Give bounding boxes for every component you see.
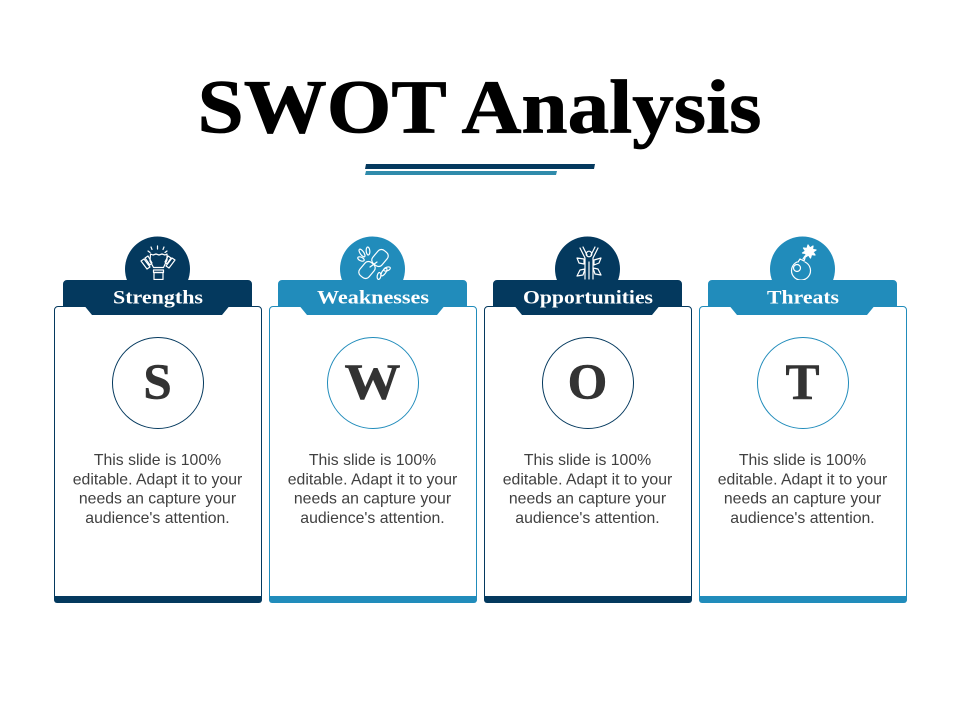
card: weaknesses <box>270 306 476 600</box>
text block: opportunities: needs an capture your <box>509 490 666 508</box>
text block: weaknesses: This slide is 100% <box>309 452 436 469</box>
text block: opportunities: This slide is 100% <box>524 452 651 469</box>
text block: strengths: editable. Adapt it to your <box>73 471 242 488</box>
letter circle: T <box>758 338 848 428</box>
card bottom bar: threats <box>699 596 907 603</box>
text block: weaknesses: audience's attention. <box>300 510 445 527</box>
title underline <box>365 164 595 175</box>
text block: threats: needs an capture your <box>724 490 881 508</box>
text block: strengths: audience's attention. <box>85 510 230 527</box>
letter circle: W: W <box>344 355 400 411</box>
letter circle: T: T <box>785 355 820 411</box>
panel: opportunities <box>484 236 692 603</box>
panel: weaknesses <box>269 236 477 603</box>
icon badge: strengths <box>125 236 190 302</box>
card bottom bar: strengths <box>54 596 262 603</box>
header tab: weaknesses <box>278 280 467 315</box>
text block: threats: audience's attention. <box>730 510 875 527</box>
text block: threats: editable. Adapt it to your <box>718 471 887 488</box>
letter circle: S: S <box>143 355 172 411</box>
text block: strengths: This slide is 100% <box>94 452 221 469</box>
header tab: opportunities <box>493 280 682 315</box>
card bottom bar: weaknesses <box>269 596 477 603</box>
text block: opportunities: editable. Adapt it to your <box>503 471 672 488</box>
panel: strengths <box>54 236 262 603</box>
header tab: strengths <box>63 280 252 315</box>
title: SWOT Analysis <box>198 66 762 150</box>
letter circle: W <box>328 338 418 428</box>
text block: weaknesses: editable. Adapt it to your <box>288 471 457 488</box>
text block: weaknesses: needs an capture your <box>294 490 451 508</box>
heading: weaknesses: Weaknesses <box>317 288 429 308</box>
panel: threats <box>699 236 907 603</box>
text block: strengths: needs an capture your <box>79 490 236 508</box>
text block: opportunities: audience's attention. <box>515 510 660 527</box>
card bottom bar: opportunities <box>484 596 692 603</box>
heading: strengths: Strengths <box>113 288 203 308</box>
text block: threats: This slide is 100% <box>739 452 866 469</box>
card: threats <box>700 306 906 600</box>
icon badge: opportunities <box>555 236 620 302</box>
card: strengths <box>54 306 262 600</box>
heading: threats: Threats <box>767 288 839 308</box>
card: opportunities <box>484 306 692 600</box>
letter circle: O: O <box>568 355 607 411</box>
letter circle: S <box>112 338 204 428</box>
heading: opportunities: Opportunities <box>523 288 653 308</box>
letter circle: O <box>542 338 634 428</box>
icon badge: threats <box>770 236 835 302</box>
header tab: threats <box>708 280 897 315</box>
icon badge: weaknesses <box>340 236 405 302</box>
